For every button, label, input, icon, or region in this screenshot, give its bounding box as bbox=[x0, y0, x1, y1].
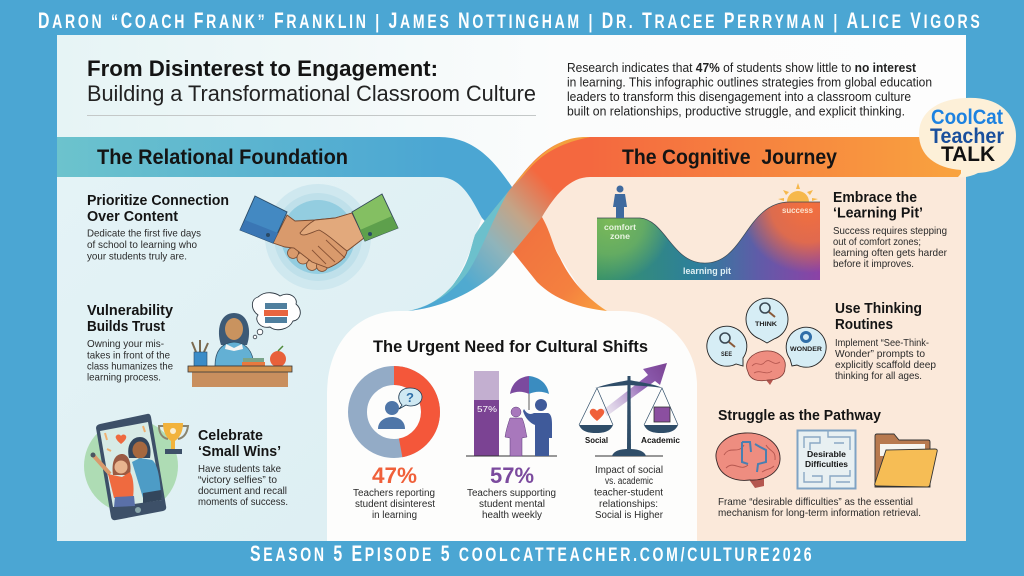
caption: desirable difficulties bbox=[718, 496, 921, 519]
block: Use Thinking Routines: Wonder” prompts to bbox=[835, 348, 925, 360]
block: Embrace the Learning Pit: Embrace the bbox=[833, 190, 917, 206]
stat: 57% teachers supporting mental health: Teachers supporting bbox=[467, 488, 556, 499]
stat: 47% teachers reporting disinterest: Teachers reporting bbox=[353, 488, 435, 499]
block: Prioritize Connection: your students truly are. bbox=[87, 250, 187, 262]
caption: impact of social vs academic: Impact of social bbox=[595, 465, 663, 476]
caption: desirable difficulties: Frame “desirable difficulties” as the essential bbox=[718, 496, 913, 508]
chart: learning pit curve: learning pit bbox=[683, 266, 731, 276]
icon: balance scale with upward arrow bbox=[579, 363, 681, 456]
block: Vulnerability Builds Trust bbox=[87, 303, 173, 384]
icon: balance scale with upward arrow: Social bbox=[585, 436, 608, 445]
chart: learning pit curve: zone bbox=[610, 231, 630, 241]
infographic panel background bbox=[57, 35, 966, 541]
block: Use Thinking Routines bbox=[835, 301, 936, 382]
logo: CoolCat Teacher Talk: TALK bbox=[941, 143, 995, 166]
block: Use Thinking Routines: explicitly scaffold deep bbox=[835, 359, 936, 371]
block: Embrace the Learning Pit: learning often gets harder bbox=[833, 247, 947, 259]
block: Use Thinking Routines: thinking for all ages. bbox=[835, 370, 922, 382]
icon: teacher at desk with thought bubble bbox=[188, 293, 300, 387]
heading: The Cognitive Journey: The Cognitive Journey bbox=[622, 146, 837, 169]
block: Embrace the Learning Pit: ‘Learning Pit’ bbox=[833, 206, 923, 222]
logo: CoolCat Teacher Talk: CoolCat bbox=[931, 106, 1003, 129]
intro paragraph: leaders to transform this disengagement into a classroom culture bbox=[567, 90, 911, 104]
caption: impact of social vs academic: relationships: bbox=[599, 499, 658, 510]
caption: impact of social vs academic bbox=[594, 465, 664, 521]
stat: 57% teachers supporting mental health: student mental bbox=[479, 499, 545, 510]
icon: see think wonder bubbles with brain: WONDER bbox=[790, 346, 822, 353]
block: Celebrate Small Wins: ‘Small Wins’ bbox=[198, 444, 281, 460]
bar chart with umbrella figures: 57%: 57% bbox=[477, 404, 498, 414]
caption: impact of social vs academic: teacher-student bbox=[594, 488, 663, 498]
block: Celebrate Small Wins: Celebrate bbox=[198, 428, 263, 444]
block: Celebrate Small Wins: document and recall bbox=[198, 485, 287, 497]
stat: 57% teachers supporting mental health: 57% bbox=[490, 463, 534, 488]
intro paragraph bbox=[567, 61, 932, 118]
caption: impact of social vs academic: Social is Higher bbox=[595, 510, 664, 521]
block: Celebrate Small Wins: moments of success. bbox=[198, 496, 288, 508]
block: Celebrate Small Wins bbox=[198, 428, 288, 508]
block: Use Thinking Routines: Implement “See-Think- bbox=[835, 337, 929, 349]
block: Vulnerability Builds Trust: Builds Trust bbox=[87, 319, 165, 335]
block: Prioritize Connection: Over Content bbox=[87, 209, 178, 225]
heading: The Relational Foundation: The Relational Foundation bbox=[97, 146, 348, 169]
block: Prioritize Connection: Prioritize Connection bbox=[87, 193, 229, 209]
block: Prioritize Connection bbox=[87, 193, 229, 262]
stat: 47% teachers reporting disinterest: in learning bbox=[372, 510, 417, 521]
block: Celebrate Small Wins: Have students take bbox=[198, 463, 281, 475]
bar chart with umbrella figures: 57% bbox=[466, 371, 557, 456]
caption: impact of social vs academic: vs. academic bbox=[605, 476, 653, 487]
intro paragraph: Research indicates that 47% of students show little to no interest bbox=[567, 61, 917, 75]
icon: see think wonder bubbles with brain: SEE bbox=[721, 351, 733, 358]
donut chart: 47% bbox=[358, 376, 430, 448]
stat: 47% teachers reporting disinterest bbox=[353, 463, 435, 521]
block: Vulnerability Builds Trust: Owning your mis- bbox=[87, 338, 164, 350]
block: Prioritize Connection: Dedicate the first five days bbox=[87, 228, 201, 240]
heading: Struggle as the Pathway: Struggle as the Pathway bbox=[718, 407, 882, 424]
icon: brain with pathway bbox=[716, 433, 780, 488]
intro paragraph: built on relationships, productive struggle, and explicit thinking. bbox=[567, 104, 905, 118]
block: Embrace the Learning Pit: before it improves. bbox=[833, 258, 914, 270]
stat: 57% teachers supporting mental health: health weekly bbox=[482, 510, 542, 521]
icon: see think wonder bubbles with brain: THINK bbox=[755, 321, 777, 328]
block: Embrace the Learning Pit: out of comfort zones; bbox=[833, 236, 921, 248]
icon: open folder bbox=[875, 434, 937, 487]
block: Embrace the Learning Pit: Success requires stepping bbox=[833, 225, 947, 237]
block: Celebrate Small Wins: “victory selfies” to bbox=[198, 474, 277, 486]
block: Vulnerability Builds Trust: takes in front of the bbox=[87, 350, 170, 362]
white center panel background bbox=[327, 252, 697, 541]
header title: From Disinterest to Engagement: bbox=[87, 56, 438, 81]
block: Vulnerability Builds Trust: class humanizes the bbox=[87, 360, 173, 372]
icon: handshake bbox=[240, 184, 398, 290]
block: Use Thinking Routines: Use Thinking bbox=[835, 301, 922, 317]
block: Vulnerability Builds Trust: Vulnerability bbox=[87, 303, 173, 319]
chart: learning pit curve: comfort bbox=[604, 222, 636, 232]
stat: 47% teachers reporting disinterest: student disinterest bbox=[355, 499, 435, 510]
stat: 57% teachers supporting mental health bbox=[467, 463, 556, 521]
heading: The Urgent Need for Cultural Shifts: The Urgent Need for Cultural Shifts bbox=[373, 338, 648, 356]
icon: phone selfie with trophy bbox=[84, 414, 188, 520]
header title bbox=[87, 56, 536, 116]
donut chart: 47%: ? bbox=[406, 390, 414, 405]
icon: balance scale with upward arrow: Academic bbox=[641, 436, 681, 445]
header title: Building a Transformational Classroom Culture bbox=[87, 81, 536, 106]
ribbon: relational band crossing into orange tail bbox=[57, 137, 607, 311]
chart: learning pit curve bbox=[597, 183, 820, 280]
chart: learning pit curve: success bbox=[782, 206, 814, 215]
icon: desirable difficulties maze: Desirable bbox=[807, 450, 847, 459]
icon: desirable difficulties maze: Difficulties bbox=[805, 460, 849, 469]
icon: see think wonder bubbles with brain bbox=[707, 298, 826, 385]
block: Use Thinking Routines: Routines bbox=[835, 317, 893, 333]
top banner: guest names: DARON “COACH FRANK” FRANKLIN | JAMES NOTTINGHAM | DR. TRACEE PERRYMAN | ALICE VIGORS bbox=[38, 10, 980, 34]
block: Embrace the Learning Pit bbox=[833, 190, 947, 270]
caption: desirable difficulties: mechanism for long-term information retrieval. bbox=[718, 507, 921, 519]
logo: CoolCat Teacher Talk bbox=[919, 98, 1016, 177]
icon: desirable difficulties maze bbox=[798, 430, 856, 488]
intro paragraph: in learning. This infographic outlines strategies from global education bbox=[567, 76, 932, 90]
ribbon: cognitive band crossing into blue tail bbox=[408, 137, 961, 311]
logo: CoolCat Teacher Talk: Teacher bbox=[930, 125, 1004, 148]
block: Vulnerability Builds Trust: learning process. bbox=[87, 372, 161, 384]
block: Prioritize Connection: of school to learning who bbox=[87, 239, 197, 251]
stat: 47% teachers reporting disinterest: 47% bbox=[372, 463, 417, 488]
bottom banner: episode and link: SEASON 5 EPISODE 5 COOLCATTEACHER.COM/CULTURE2026 bbox=[250, 543, 812, 567]
